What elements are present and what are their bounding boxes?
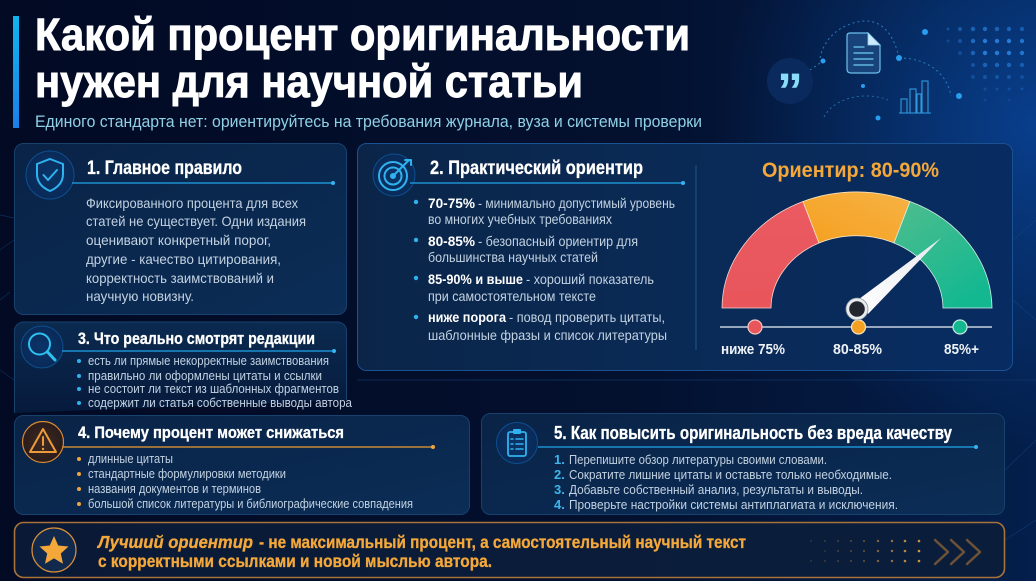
body text 1: Фиксированного процента для всех (86, 195, 298, 211)
list 5: 1. (554, 452, 565, 467)
panel 5: how to improve (482, 414, 1004, 514)
icon: quote (767, 58, 813, 119)
list 5: 3. (554, 482, 565, 497)
accent bar (13, 16, 19, 128)
list 3: не состоит ли текст из шаблонных фрагментов (88, 381, 339, 396)
banner text: Лучший ориентир (96, 532, 253, 552)
gauge labels (721, 341, 979, 358)
icon: clipboard (496, 422, 538, 464)
heading 2: 2. Практический ориентир (430, 158, 643, 179)
list 5: Добавьте собственный анализ, результаты и выводы. (569, 482, 863, 497)
panel 3: what editors check (14, 322, 353, 413)
subtitle: Единого стандарта нет: ориентируйтесь на требования журнала, вуза и системы проверки (35, 113, 702, 131)
icon: warning (22, 422, 64, 462)
list 5: Сократите лишние цитаты и оставьте только необходимые. (569, 467, 892, 482)
list 2: при самостоятельном тексте (428, 288, 596, 304)
list 4: большой список литературы и библиографические совпадения (88, 496, 413, 511)
list 2: 80-85% (428, 233, 476, 249)
body text 1: научную новизну. (86, 288, 194, 304)
list 5: 4. (554, 497, 565, 512)
icon: quote: ” (777, 63, 803, 119)
list 4: названия документов и терминов (88, 481, 261, 496)
title (35, 9, 690, 107)
list 2: - безопасный ориентир для (478, 233, 638, 249)
icon: shield (26, 151, 74, 199)
header illustration: document, quote and chart (767, 21, 1024, 120)
body text 1 (86, 195, 306, 304)
heading 4: 4. Почему процент может снижаться (78, 423, 344, 442)
list 5: 2. (554, 467, 565, 482)
list 4: длинные цитаты (88, 451, 173, 466)
panel 2: practical guide (358, 144, 1012, 370)
list 5: Проверьте настройки системы антиплагиата и исключения. (569, 497, 898, 512)
heading 5: 5. Как повысить оригинальность без вреда качеству (554, 423, 952, 443)
list 4 (77, 451, 413, 511)
heading 3: 3. Что реально смотрят редакции (78, 329, 315, 348)
title: нужен для научной статьи (35, 56, 583, 107)
bottom banner (14, 522, 1004, 578)
banner text: - не максимальный процент, а самостоятельный научный текст (259, 532, 746, 552)
list 2: - повод проверить цитаты, (509, 309, 665, 325)
list 2: 70-75% (428, 195, 476, 211)
gauge labels: 80-85% (833, 341, 882, 358)
body text 1: оценивают конкретный порог, (86, 232, 271, 248)
list 4: стандартные формулировки методики (88, 466, 286, 481)
list 2: во многих учебных требованиях (428, 211, 612, 227)
banner text: с корректными ссылками и новой мыслью автора. (98, 551, 492, 571)
list 5 (554, 452, 898, 512)
chevron arrows (935, 540, 980, 564)
list 2: большинства научных статей (428, 249, 598, 265)
body text 1: корректность заимствований и (86, 270, 274, 286)
gauge needle (846, 238, 941, 320)
gauge labels: ниже 75% (721, 341, 785, 358)
gauge chart (720, 192, 992, 358)
list 2: - минимально допустимый уровень (478, 195, 675, 211)
icon: target (373, 154, 415, 196)
title: Какой процент оригинальности (35, 9, 690, 60)
dot pattern (810, 540, 920, 562)
list 3 (77, 353, 353, 410)
heading 1: 1. Главное правило (87, 158, 242, 179)
gauge scale (720, 320, 992, 334)
banner text (96, 532, 746, 571)
panel 4: why percentage falls (14, 416, 470, 514)
list 2 (414, 195, 675, 343)
list 3: правильно ли оформлены цитаты и ссылки (88, 368, 322, 383)
list 5: Перепишите обзор литературы своими словами. (569, 452, 827, 467)
list 2: - хороший показатель (526, 271, 654, 287)
list 2: ниже порога (428, 309, 506, 325)
list 2: 85-90% и выше (428, 271, 523, 287)
icon: document (847, 33, 880, 73)
gauge heading: Ориентир: 80-90% (762, 158, 939, 182)
body text 1: статей не существует. Одни издания (86, 213, 306, 229)
faint network lines (0, 215, 1036, 540)
icon: star (32, 528, 76, 572)
body text 1: другие - качество цитирования, (86, 251, 281, 267)
list 3: есть ли прямые некорректные заимствования (88, 353, 329, 368)
icon: magnifier (21, 326, 63, 368)
gauge labels: 85%+ (944, 341, 979, 358)
list 2: шаблонные фразы и список литературы (428, 327, 667, 343)
panel 1: main rule (14, 144, 346, 314)
list 3: содержит ли статья собственные выводы автора (88, 395, 353, 410)
icon: bar chart (899, 81, 931, 113)
